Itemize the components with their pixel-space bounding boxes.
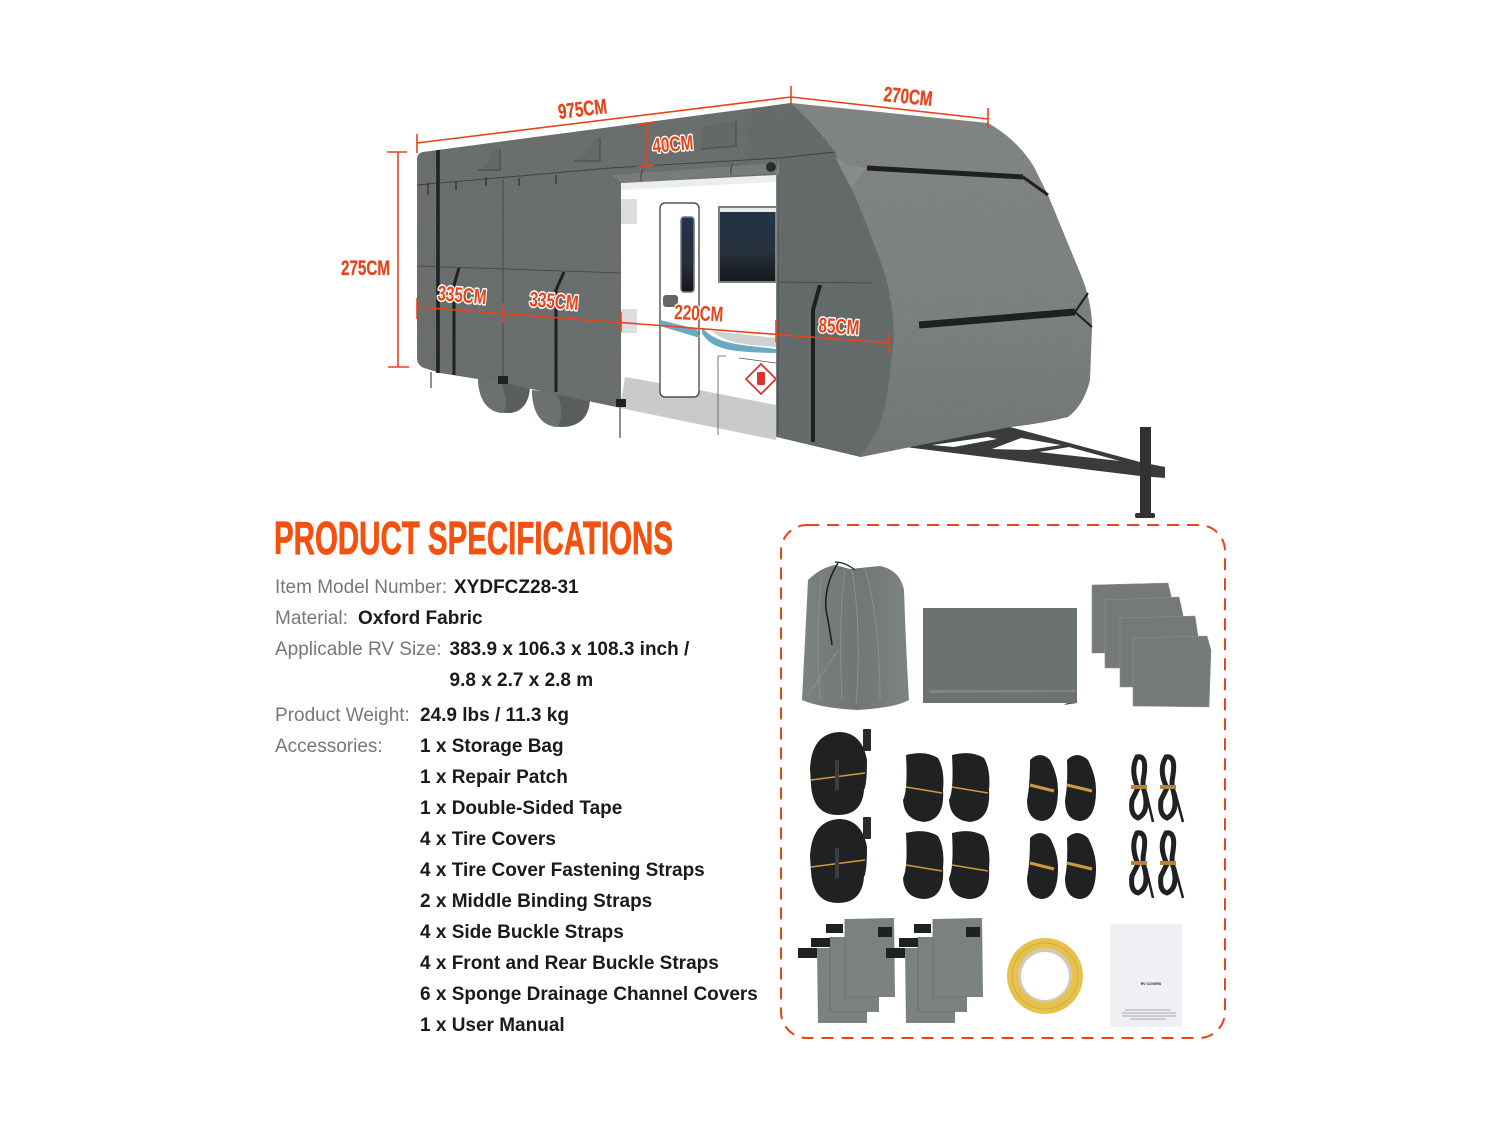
- spec: weight: 24.9 lbs / 11.3 kg: [420, 705, 569, 726]
- spec: accessories list: 1 x User Manual: [420, 1015, 565, 1036]
- spec: accessories list: 4 x Tire Cover Fastening Straps: [420, 860, 705, 881]
- sponge drainage covers left: [798, 918, 895, 1023]
- label: 40CM: 40CM: [651, 131, 694, 158]
- spec: material: Oxford Fabric: [358, 608, 483, 629]
- double-sided tape roll: [1007, 938, 1083, 1014]
- label: 335CM right: 335CM: [529, 288, 579, 315]
- label: 275CM: 275CM: [341, 257, 390, 280]
- label: 270CM: 270CM: [882, 83, 934, 111]
- spec: accessories list: 4 x Side Buckle Straps: [420, 922, 624, 943]
- spec: accessories list: 6 x Sponge Drainage Channel Covers: [420, 984, 758, 1005]
- spec: accessories list: Accessories:: [275, 736, 383, 757]
- hatch: [718, 356, 776, 435]
- sponge drainage covers right: [886, 918, 983, 1023]
- wheel covers: [478, 378, 590, 427]
- user manual: [1110, 924, 1182, 1027]
- label: 220CM: 220CM: [674, 301, 724, 327]
- title: PRODUCT SPECIFICATIONS: [274, 512, 673, 564]
- door: [660, 203, 699, 397]
- middle binding straps: [810, 729, 871, 903]
- a-frame hitch and jack: [905, 427, 1165, 518]
- label: 85CM: 85CM: [818, 314, 860, 340]
- spec: material: Material:: [275, 608, 348, 629]
- spec: applicable size: 9.8 x 2.7 x 2.8 m: [450, 670, 593, 691]
- trailer illustration: [417, 103, 1165, 518]
- cover side panel: [417, 103, 835, 408]
- panel: accessories: [781, 525, 1225, 1038]
- spec: applicable size: [275, 639, 690, 691]
- label: 335CM left: 335CM: [437, 282, 487, 309]
- spec: model number: XYDFCZ28-31: [454, 577, 579, 598]
- spec: material: [275, 608, 483, 629]
- spec: accessories list: [275, 736, 758, 1036]
- spec: weight: Product Weight:: [275, 705, 410, 726]
- white trailer body: [620, 175, 776, 440]
- storage bag: [802, 562, 909, 710]
- repair patch: [923, 608, 1077, 705]
- side buckle straps: [903, 753, 989, 899]
- label: 975CM: 975CM: [557, 95, 608, 124]
- vent labels: [621, 199, 637, 224]
- roof seam and vents: [417, 120, 872, 437]
- spec: accessories list: 2 x Middle Binding Straps: [420, 891, 652, 912]
- window: [719, 207, 776, 282]
- spec: model number: [275, 577, 579, 598]
- front and rear buckle straps: [1027, 755, 1096, 899]
- spec: accessories list: 4 x Front and Rear Buckle Straps: [420, 953, 719, 974]
- user manual: RV COVERS: [1141, 982, 1162, 986]
- spec: applicable size: 383.9 x 106.3 x 108.3 inch /: [450, 639, 690, 660]
- cover front end cap: [745, 103, 1092, 457]
- spec: accessories list: 1 x Repair Patch: [420, 767, 568, 788]
- black straps: [428, 150, 1092, 442]
- tire covers: [1092, 583, 1211, 707]
- spec: accessories list: 4 x Tire Covers: [420, 829, 556, 850]
- spec: accessories list: 1 x Double-Sided Tape: [420, 798, 622, 819]
- spec: model number: Item Model Number:: [275, 577, 447, 598]
- hazard diamond: [746, 364, 776, 394]
- spec: weight: [275, 705, 569, 726]
- tire cover fastening straps: [1131, 757, 1183, 898]
- spec: accessories list: 1 x Storage Bag: [420, 736, 564, 757]
- teal stripe: [660, 320, 776, 353]
- spec: applicable size: Applicable RV Size:: [275, 639, 442, 660]
- dimension lines: [387, 86, 988, 367]
